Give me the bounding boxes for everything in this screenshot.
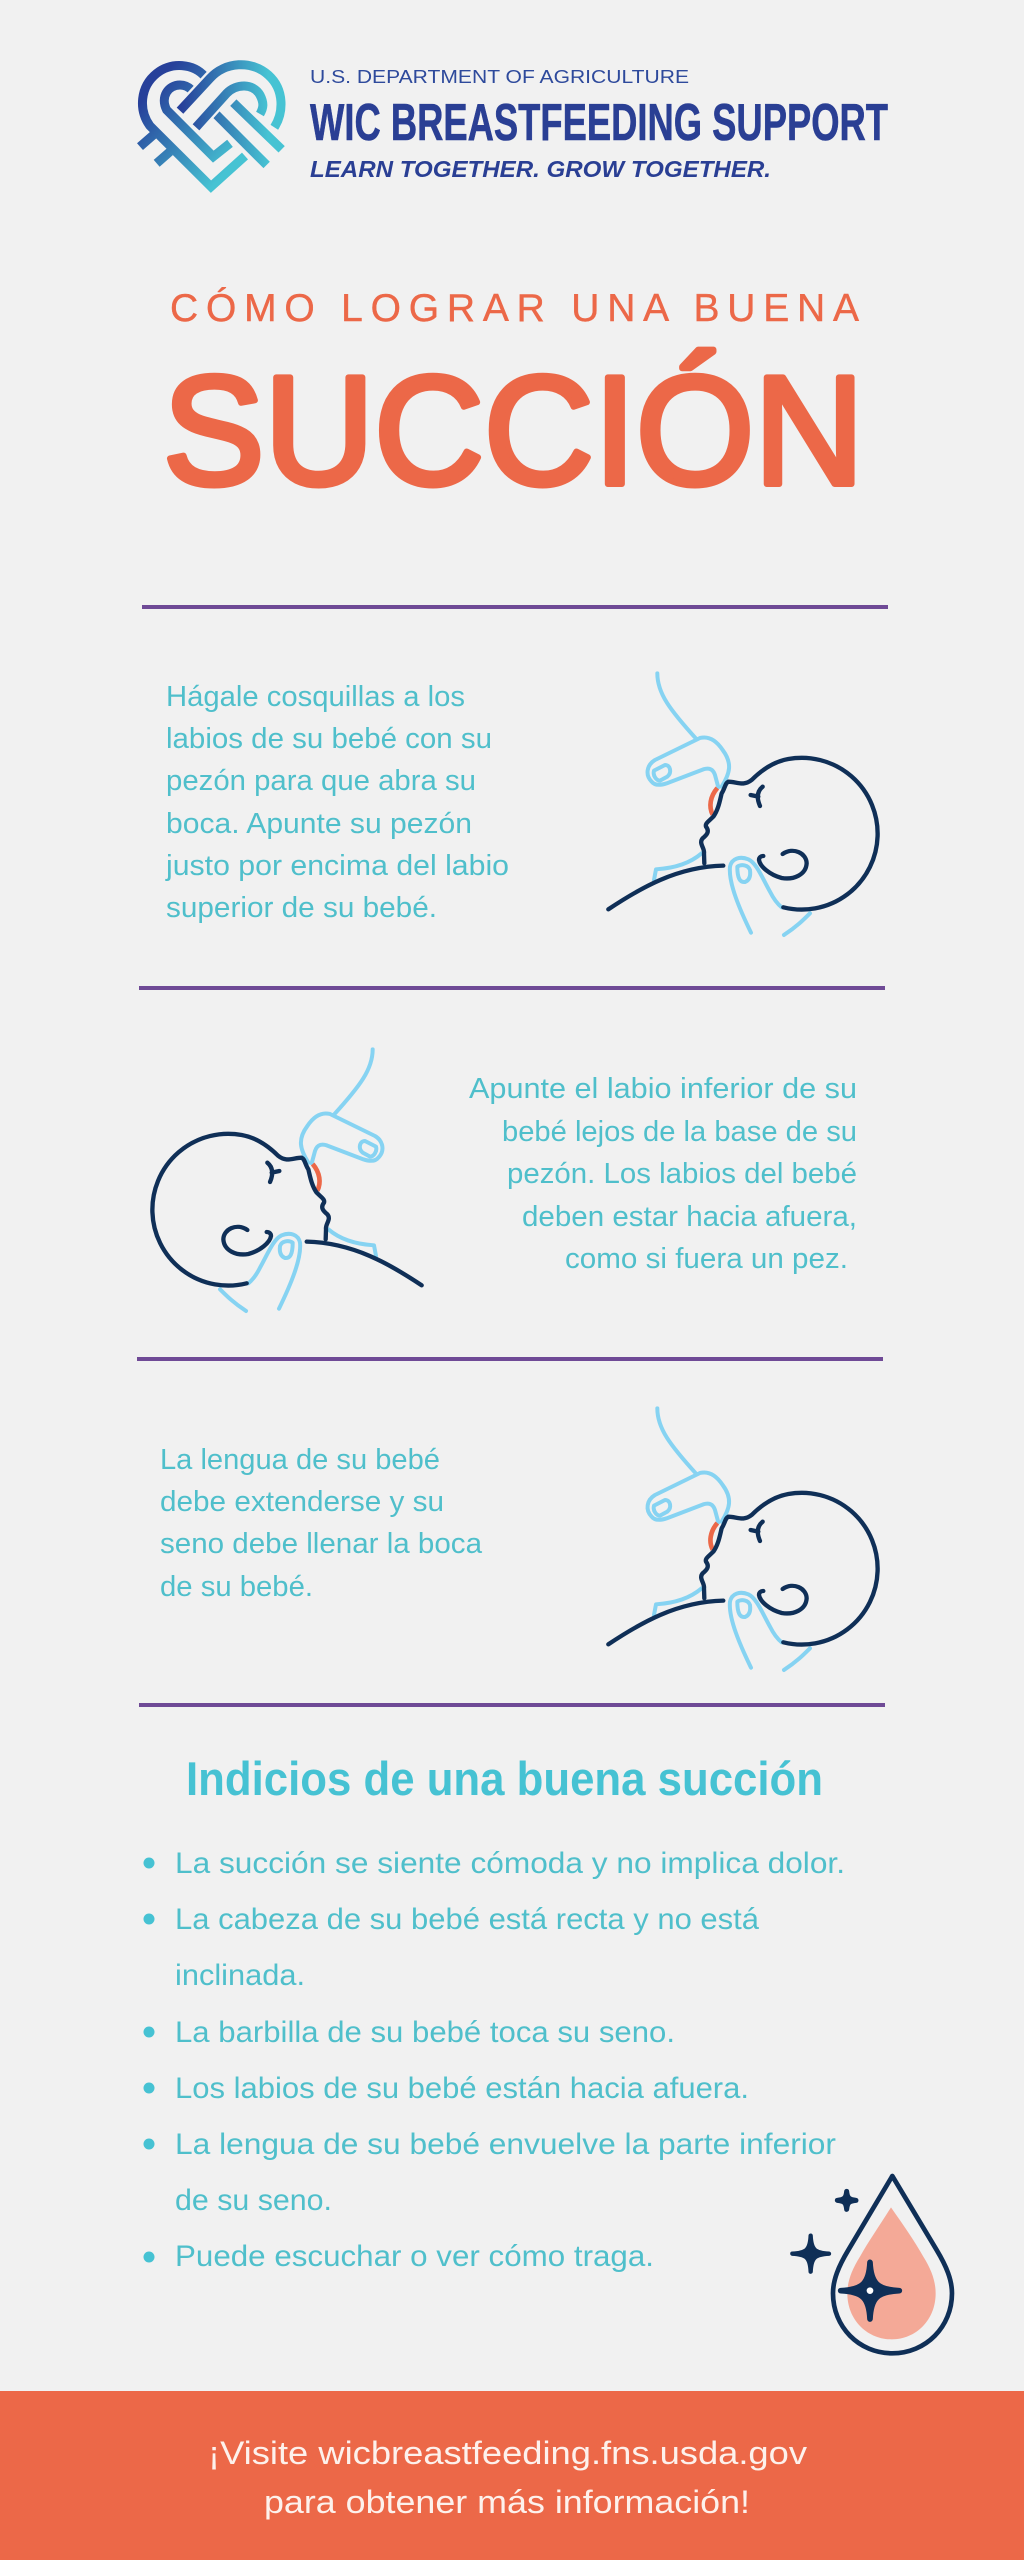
- bullet list: La barbilla de su bebé toca su seno.: [175, 2016, 675, 2049]
- bullet list: Puede escuchar o ver cómo traga.: [175, 2240, 654, 2273]
- heading: signs of a good latch: Indicios de una buena succión: [186, 1752, 823, 1805]
- text block: step 3: seno debe llenar la boca: [160, 1528, 483, 1560]
- text block: step 3: La lengua de su bebé: [160, 1444, 440, 1476]
- text block: step 1: [165, 681, 509, 924]
- footer text line 1: ¡Visite wicbreastfeeding.fns.usda.gov: [208, 2435, 807, 2471]
- footer banner: [0, 2391, 1024, 2560]
- text block: step 2: como si fuera un pez.: [565, 1243, 848, 1275]
- bullet list: de su seno.: [175, 2184, 332, 2217]
- title line 1: CÓMO LOGRAR UNA BUENA: [170, 287, 859, 330]
- text block: step 1: Hágale cosquillas a los: [166, 681, 465, 713]
- text block: step 2: pezón. Los labios del bebé: [507, 1158, 857, 1190]
- icon: baby latching, step 3: [608, 1408, 878, 1670]
- text block: step 2: deben estar hacia afuera,: [522, 1201, 857, 1233]
- text block: step 2: [469, 1073, 857, 1275]
- title line 2: SUCCIÓN: [163, 344, 864, 517]
- icon: baby latching, step 2: [152, 1049, 422, 1311]
- bullet list: La cabeza de su bebé está recta y no está: [175, 1903, 759, 1936]
- text block: step 3: de su bebé.: [160, 1571, 313, 1603]
- bullet list: La lengua de su bebé envuelve la parte inferior: [175, 2128, 836, 2161]
- icon: milk drop with sparkles: [792, 2176, 952, 2353]
- bullet list: La succión se siente cómoda y no implica dolor.: [175, 1847, 845, 1880]
- logo text: department: U.S. DEPARTMENT OF AGRICULTURE: [310, 66, 689, 87]
- text block: step 2: bebé lejos de la base de su: [502, 1116, 857, 1148]
- text block: step 1: boca. Apunte su pezón: [166, 808, 472, 840]
- text block: step 1: justo por encima del labio: [165, 850, 509, 882]
- bullet list: [144, 1847, 845, 2273]
- bullet list: Los labios de su bebé están hacia afuera.: [175, 2072, 749, 2105]
- text block: step 3: debe extenderse y su: [160, 1486, 444, 1518]
- logo: interlaced heart: [140, 65, 282, 187]
- text block: step 2: Apunte el labio inferior de su: [469, 1073, 857, 1105]
- icon: baby latching, step 1: [608, 673, 878, 935]
- text block: step 1: pezón para que abra su: [166, 765, 476, 797]
- logo text: tagline: LEARN TOGETHER. GROW TOGETHER.: [310, 156, 771, 182]
- text block: step 1: labios de su bebé con su: [166, 723, 492, 755]
- text block: step 1: superior de su bebé.: [166, 892, 437, 924]
- bullet list: inclinada.: [175, 1959, 305, 1992]
- text block: step 3: [160, 1444, 483, 1603]
- footer text line 2: para obtener más información!: [264, 2484, 750, 2520]
